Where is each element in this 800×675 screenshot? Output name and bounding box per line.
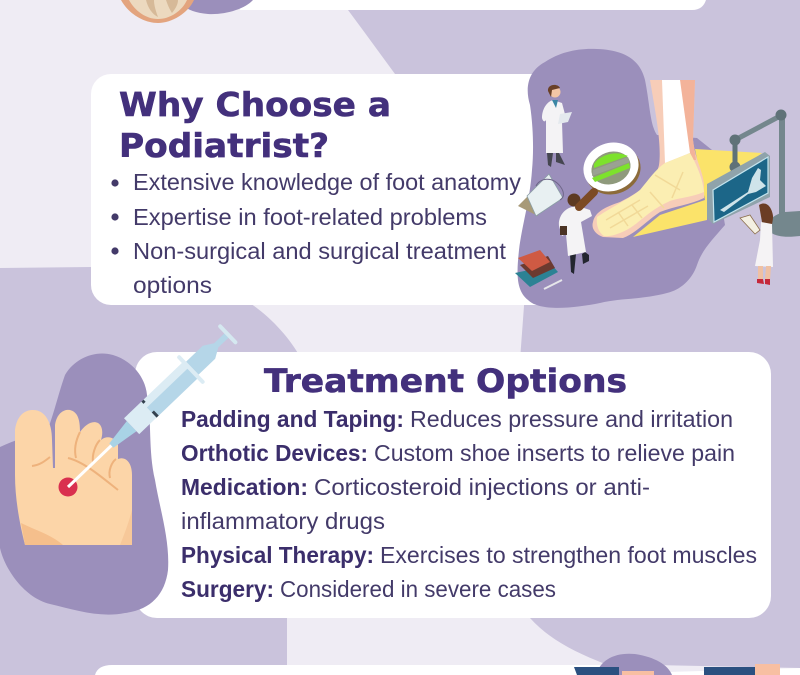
treatment list: Orthotic Devices:	[181, 440, 368, 466]
heading: why choose a podiatrist: Podiatrist?	[119, 126, 329, 165]
bullet list: Expertise in foot-related problems	[133, 204, 487, 230]
bullet list: options	[133, 272, 212, 298]
heading: treatment options: Treatment Options	[264, 362, 627, 400]
doctor with clipboard	[740, 203, 773, 285]
bullet list	[111, 169, 521, 298]
panel: bottom card (cropped)	[95, 665, 800, 675]
illustration: toe injection	[0, 319, 242, 615]
treatment list: Surgery:	[181, 576, 274, 602]
panel: why choose a podiatrist	[91, 74, 571, 305]
treatment list: inflammatory drugs	[181, 508, 385, 534]
heading: why choose a podiatrist: Why Choose a	[119, 85, 391, 124]
foot	[15, 410, 132, 545]
leg and foot	[592, 80, 704, 238]
x-ray stand	[730, 110, 800, 237]
treatment list: Considered in severe cases	[280, 576, 556, 602]
injection site	[58, 478, 78, 496]
bullet list: Non-surgical and surgical treatment	[133, 238, 507, 264]
treatment list: Custom shoe inserts to relieve pain	[374, 440, 735, 466]
heading: why choose a podiatrist	[119, 85, 391, 165]
doctor with magnifier	[559, 192, 594, 274]
doctor reading	[542, 85, 572, 167]
treatment list: Exercises to strengthen foot muscles	[380, 542, 757, 568]
calendar	[518, 174, 563, 216]
treatment list: Medication:	[181, 474, 308, 500]
illustration: bottom figures (cropped)	[574, 654, 780, 675]
illustration: foot x-ray examination	[515, 49, 800, 308]
magnifying glass	[576, 135, 648, 202]
icon: top blob and foot (cropped)	[121, 0, 253, 23]
blob	[518, 49, 725, 308]
x-ray monitor	[707, 152, 770, 224]
foot bones	[597, 153, 704, 236]
panel: top card (cropped)	[240, 0, 706, 10]
treatment list: Padding and Taping:	[181, 406, 404, 432]
syringe	[55, 319, 242, 501]
panel: treatment options	[135, 352, 771, 618]
blob	[0, 354, 168, 615]
x-ray beam	[633, 149, 762, 237]
books	[515, 250, 562, 289]
treatment list: Corticosteroid injections or anti-	[314, 474, 650, 500]
treatment list: Physical Therapy:	[181, 542, 374, 568]
treatment list	[181, 406, 757, 602]
bullet list: Extensive knowledge of foot anatomy	[133, 169, 521, 195]
treatment list: Reduces pressure and irritation	[410, 406, 733, 432]
